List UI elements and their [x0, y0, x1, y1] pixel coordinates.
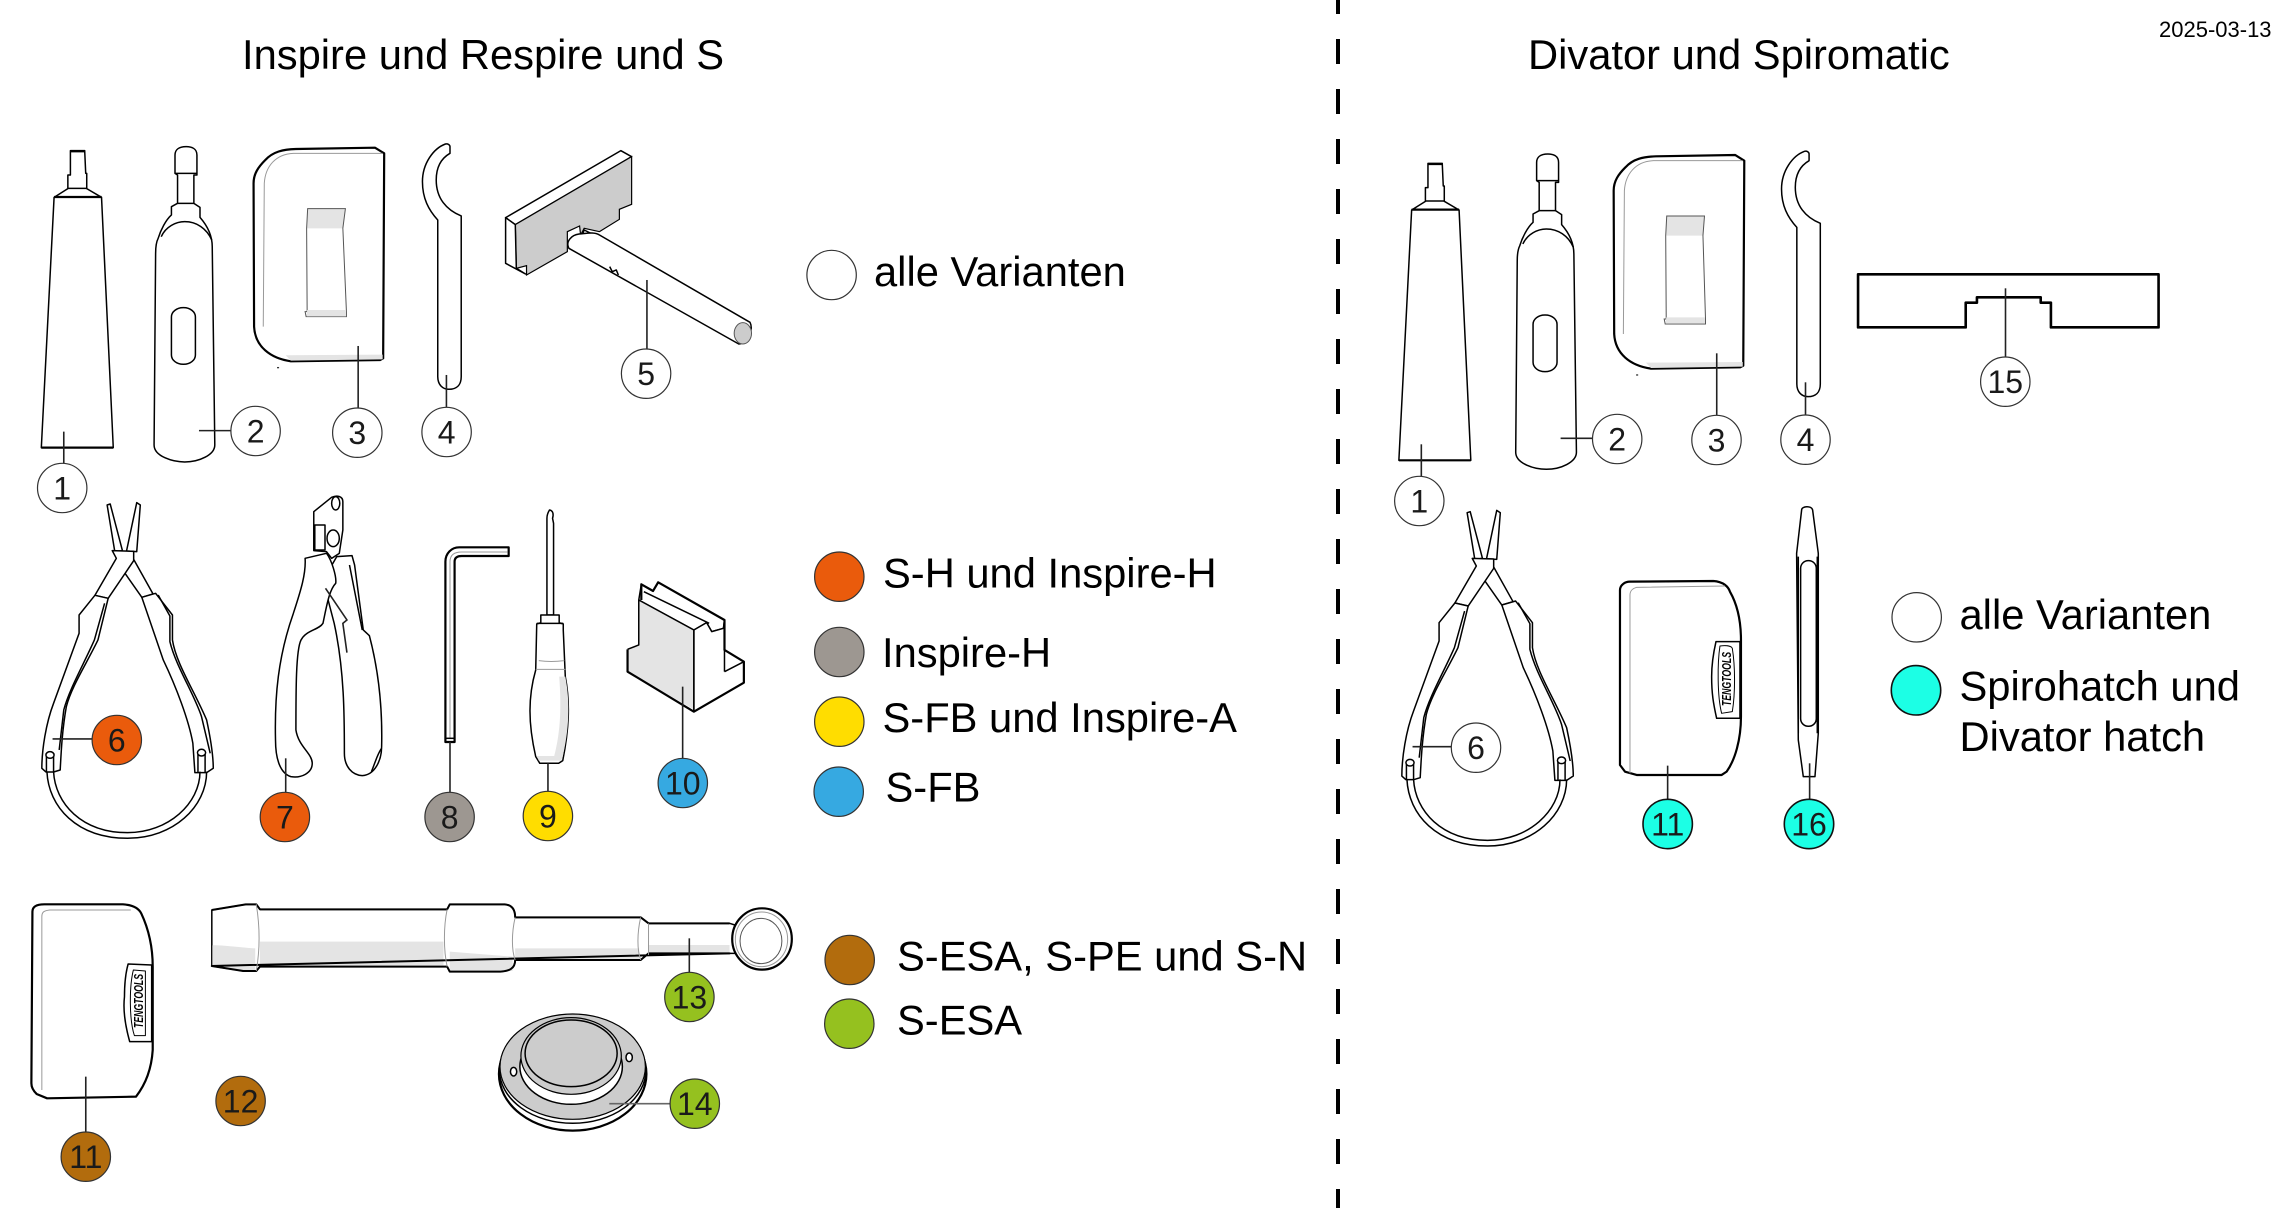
icon: T-tool 5: [506, 151, 752, 351]
icon: card 3: [254, 148, 384, 409]
panel: right: [1395, 151, 2240, 849]
icon: tool case 11: [31, 904, 153, 1133]
legend item: S-ESA: S-ESA: [897, 996, 1022, 1043]
legend item: Spirohatch und Divator hatch: Divator hatch: [1960, 713, 2205, 760]
callout 1: [38, 463, 87, 513]
icon: profile 15: [1858, 274, 2159, 358]
legend item: S-FB: [814, 764, 980, 816]
legend item: Inspire-H: Inspire-H: [882, 629, 1051, 676]
callout 11: 11: [1651, 806, 1684, 842]
legend item: Spirohatch und Divator hatch: [1891, 663, 2240, 760]
legend item: alle Varianten: alle Varianten: [874, 248, 1126, 295]
icon: tool case 11: [1620, 581, 1741, 801]
callout 2: 2: [247, 414, 264, 450]
callout 6: 6: [108, 722, 126, 758]
callout 3: [333, 408, 382, 457]
icon: cutters 7: [275, 496, 382, 794]
legend: right panel: [1891, 591, 2240, 760]
callout 12: [216, 1076, 265, 1126]
callout 7: 7: [276, 800, 294, 836]
icon: block 10: [628, 582, 744, 760]
callout 11: [61, 1132, 110, 1181]
callout 3: [1692, 415, 1741, 465]
callout 4: [422, 407, 471, 457]
legend item: alle Varianten: alle Varianten: [1960, 591, 2211, 638]
callout 16: [1784, 799, 1834, 849]
callout 6: [92, 715, 142, 765]
icon: tool case 11: TENGTOOLS: [131, 974, 146, 1028]
icon: tube 1: [41, 151, 113, 465]
callout 3: 3: [1708, 422, 1725, 458]
legend item: S-FB und Inspire-A: S-FB und Inspire-A: [882, 694, 1237, 741]
callout 2: [231, 406, 280, 456]
callout 13: [665, 972, 714, 1022]
callout 7: [260, 792, 310, 842]
icon: tool 16: [1797, 507, 1818, 801]
icon: pliers 6: [1402, 510, 1573, 846]
callout 11: 11: [69, 1139, 102, 1175]
legend item: S-ESA, S-PE und S-N: S-ESA, S-PE und S-N: [897, 933, 1307, 980]
callout 11: [1643, 799, 1692, 849]
icon: wrench 4: [1782, 151, 1820, 417]
callout 1: 1: [1410, 484, 1428, 520]
callout 2: 2: [1608, 422, 1626, 458]
callout 12: 12: [223, 1084, 258, 1120]
icon: torque wrench 13: [212, 904, 792, 974]
legend item: S-H und Inspire-H: S-H und Inspire-H: [883, 549, 1217, 596]
callout 8: [425, 792, 474, 842]
callout 4: 4: [438, 414, 455, 450]
icon: hex key 8: [445, 547, 509, 794]
callout 4: 4: [1797, 422, 1814, 458]
icon: tube 1: [1399, 163, 1471, 478]
title: left panel: Inspire und Respire und S: [242, 31, 724, 78]
callout 1: [1395, 476, 1444, 526]
callout 6: 6: [1467, 730, 1485, 766]
callout 15: 15: [1988, 364, 2023, 400]
legend item: S-FB: S-FB: [886, 764, 980, 811]
icon: screwdriver 9: [530, 510, 568, 793]
callout 6: [1451, 723, 1501, 772]
callout 1: 1: [53, 470, 71, 506]
legend item: Inspire-H: [815, 627, 1051, 677]
legend item: Spirohatch und Divator hatch: Spirohatch und: [1960, 663, 2240, 710]
callout 16: 16: [1791, 806, 1827, 842]
callout 14: 14: [677, 1086, 713, 1122]
callouts: left panel numbers: [38, 349, 720, 1181]
callouts: right panel numbers: [1395, 357, 2030, 849]
icon: card 3: [1614, 155, 1744, 417]
callout 3: 3: [348, 415, 366, 451]
callout 9: [523, 791, 573, 841]
panel: left: [31, 144, 1307, 1181]
callout 5: [621, 349, 671, 398]
callout 9: 9: [539, 798, 557, 834]
callout 5: 5: [637, 356, 655, 392]
dashed divider between panels: [1336, 0, 1340, 1208]
callout 13: 13: [672, 980, 707, 1016]
icon: tool case 11: TENGTOOLS: [1719, 652, 1734, 706]
callout 10: [658, 758, 708, 808]
icon: pliers 6: [42, 503, 213, 838]
legend: left panel: [807, 248, 1307, 1048]
callout 4: [1781, 415, 1830, 464]
callout 10: 10: [665, 766, 701, 802]
icon: handle 2: [1516, 154, 1593, 469]
callout 14: [670, 1079, 720, 1128]
callout 15: [1981, 357, 2030, 406]
title: right panel: Divator und Spiromatic: [1528, 31, 1950, 78]
icon: handle 2: [154, 147, 233, 462]
icon: disc 14: [499, 1014, 672, 1131]
callout 2: [1592, 414, 1642, 464]
callout 8: 8: [441, 800, 458, 836]
date stamp: 2025-03-13: [2159, 17, 2272, 42]
icon: wrench 4: [422, 144, 461, 409]
legend item: S-ESA: [825, 996, 1022, 1048]
